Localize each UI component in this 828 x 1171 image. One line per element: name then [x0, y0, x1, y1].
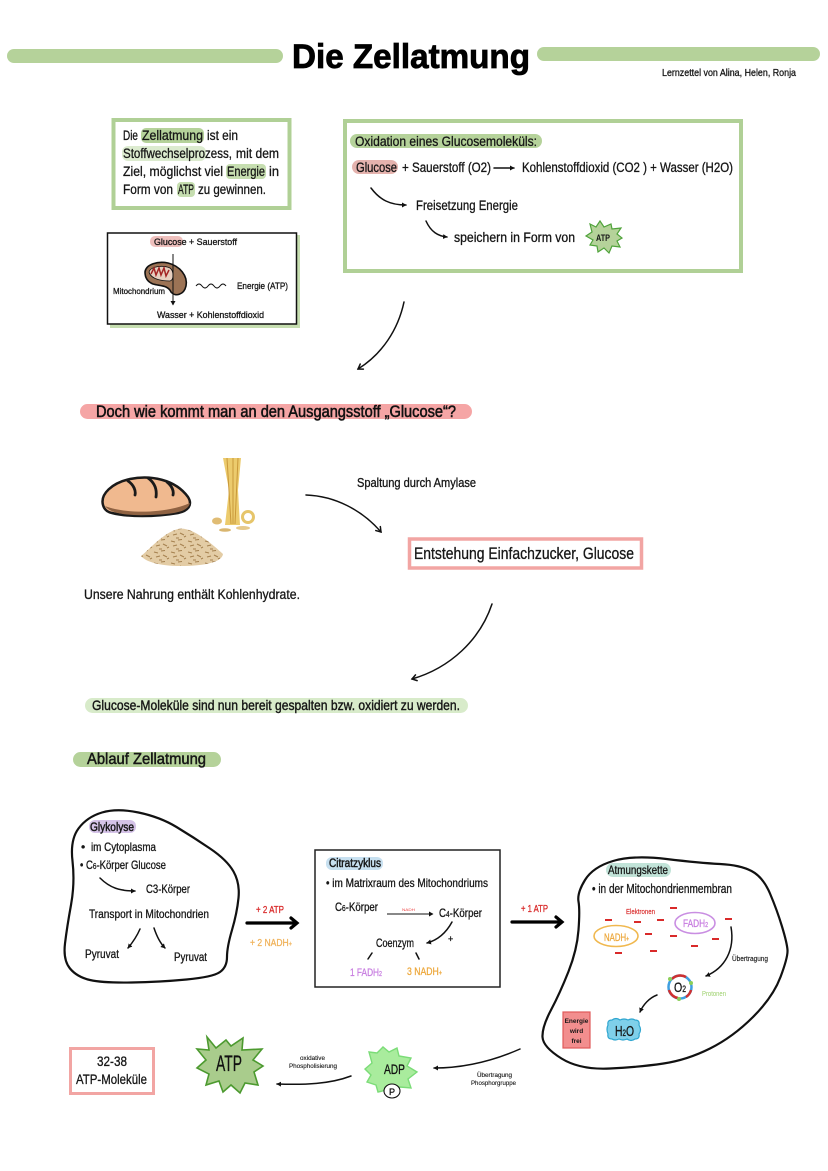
- panel: definition: in: [269, 164, 279, 179]
- panel: glycolysis: im Cytoplasma: [91, 840, 156, 854]
- arrow: to simple sugars: [306, 495, 381, 532]
- panel: oxidation of a glucose molecule: Oxidation eines Glucosemoleküls:: [355, 134, 537, 149]
- panel: simple sugar formation: [410, 539, 642, 568]
- panel: glycolysis: C3-Körper: [146, 882, 190, 896]
- panel: respiratory chain: Elektronen: [626, 907, 655, 916]
- panel: citrate cycle: • im Matrixraum des Mitochondriums: [326, 876, 488, 890]
- box: energy released: wird: [569, 1028, 583, 1035]
- panel: mitochondrion diagram: Glucose + Sauerstoff: [154, 237, 237, 247]
- arrow: citrate cycle to respiratory chain: + 1 ATP: [521, 903, 548, 915]
- panel: definition: Die: [123, 128, 138, 143]
- icon: ADP burst: [365, 1047, 417, 1098]
- label: cleavage by amylase: Spaltung durch Amylase: [357, 476, 476, 490]
- panel: definition: ATP: [178, 182, 194, 197]
- icon: ADP burst: ADP: [384, 1062, 405, 1077]
- panel: oxidation of a glucose molecule: Glucose: [356, 160, 397, 175]
- panel: definition: Energie: [227, 164, 265, 179]
- box: 32-38 ATP molecules: 32-38: [97, 1053, 127, 1069]
- panel: citrate cycle: [315, 850, 500, 987]
- title banner: [7, 38, 820, 76]
- icon: grain pile: [141, 529, 223, 566]
- oval: NADH: NADH+: [604, 932, 629, 944]
- arrow: oxidative phosphorylation: Phospholisierung: [289, 1063, 337, 1070]
- panel: citrate cycle: C6-Körper: [335, 900, 378, 914]
- heading: glucose question: Doch wie kommt man an den Ausgangsstoff „Glucose“?: [96, 403, 456, 421]
- arrow: to glucose molecules: [412, 604, 492, 679]
- icon: ATP burst small: [586, 221, 622, 253]
- panel: definition: mit dem: [236, 146, 279, 161]
- panel: citrate cycle: NADH: [402, 907, 415, 912]
- panel: simple sugar formation: Entstehung Einfachzucker, Glucose: [414, 545, 634, 563]
- panel: glycolysis: [65, 810, 239, 983]
- icon: ATP burst small: ATP: [596, 233, 611, 244]
- panel: glycolysis: Pyruvat: [85, 947, 120, 961]
- panel: citrate cycle: 1 FADH2: [350, 967, 382, 979]
- panel: glycolysis: •: [81, 840, 85, 854]
- panel: oxidation of a glucose molecule: speichern in Form von: [454, 230, 575, 245]
- icon: ATP burst large: [197, 1037, 263, 1093]
- panel: citrate cycle: +: [448, 934, 453, 944]
- panel: respiratory chain: Atmungskette: [608, 863, 668, 877]
- panel: citrate cycle: 3 NADH+: [407, 966, 442, 978]
- oval: FADH2: [675, 912, 715, 934]
- panel: citrate cycle: C4-Körper: [439, 906, 482, 920]
- arrow: glycolysis to citrate cycle: [247, 904, 297, 949]
- arrow: glycolysis to citrate cycle: + 2 NADH+: [250, 937, 292, 949]
- icon: bread: [103, 478, 190, 516]
- arrow: phosphate transfer: Phosphorgruppe: [471, 1080, 516, 1087]
- icon: ADP burst: P: [389, 1087, 395, 1097]
- panel: definition: Form von: [123, 182, 173, 197]
- arrow: phosphate transfer: [434, 1049, 520, 1087]
- icon: mitochondrion: [145, 262, 186, 295]
- arrow: oxidative phosphorylation: oxidative: [300, 1055, 325, 1062]
- oval: NADH: [594, 926, 638, 946]
- panel: oxidation of a glucose molecule: Freisetzung Energie: [416, 198, 518, 213]
- box: energy released: frei: [571, 1038, 582, 1045]
- icon: pasta: [212, 458, 254, 532]
- panel: respiratory chain: Protonen: [702, 989, 726, 998]
- box: 32-38 ATP molecules: [70, 1048, 154, 1094]
- callout: glucose molecules ready: Glucose-Moleküle sind nun bereit gespalten bzw. oxidiert zu werden.: [92, 697, 460, 713]
- panel: definition: Stoffwechselprozess,: [123, 146, 232, 161]
- panel: definition: Zellatmung: [142, 128, 203, 143]
- arrow: glycolysis to citrate cycle: + 2 ATP: [256, 904, 284, 916]
- panel: mitochondrion diagram: [108, 233, 300, 328]
- box: energy released: [563, 1012, 590, 1048]
- heading: process of cellular respiration: Ablauf Zellatmung: [87, 751, 206, 768]
- icon: water cloud: H2O: [615, 1023, 634, 1040]
- panel: mitochondrion diagram: Wasser + Kohlenstoffdioxid: [157, 310, 264, 320]
- icon: oxygen ring: O2: [674, 979, 686, 995]
- panel: oxidation of a glucose molecule: [345, 121, 741, 271]
- title: Die Zellatmung: [292, 38, 530, 76]
- panel: glycolysis: • C6-Körper Glucose: [80, 858, 166, 872]
- panel: definition: zu gewinnen.: [198, 182, 266, 197]
- icon: oxygen ring: [668, 975, 693, 1001]
- panel: oxidation of a glucose molecule: + Sauerstoff (O2): [402, 160, 491, 175]
- box: energy released: Energie: [565, 1018, 589, 1025]
- authors note: Lernzettel von Alina, Helen, Ronja: [662, 67, 796, 79]
- panel: glycolysis: Pyruvat: [174, 950, 208, 964]
- panel: respiratory chain: • in der Mitochondrienmembran: [592, 882, 732, 896]
- panel: citrate cycle: Citratzyklus: [329, 858, 381, 870]
- panel: definition: ist ein: [207, 128, 238, 143]
- text: food contains carbohydrates: Unsere Nahrung enthält Kohlenhydrate.: [84, 587, 300, 602]
- panel: glycolysis: Glykolyse: [90, 822, 134, 834]
- arrow: citrate cycle to respiratory chain: [512, 903, 562, 927]
- oval: FADH2: FADH2: [683, 918, 708, 930]
- icon: ATP burst large: ATP: [216, 1051, 242, 1076]
- box: 32-38 ATP molecules: ATP-Moleküle: [76, 1071, 147, 1087]
- panel: respiratory chain: Übertragung: [732, 954, 768, 963]
- panel: mitochondrion diagram: Energie (ATP): [237, 281, 288, 291]
- panel: mitochondrion diagram: Mitochondrium: [113, 286, 165, 296]
- arrow: phosphate transfer: Übertragung: [477, 1071, 512, 1079]
- panel: definition: Ziel, möglichst viel: [123, 164, 223, 179]
- electrons: [605, 907, 732, 954]
- arrow: oxidative phosphorylation: [277, 1055, 351, 1084]
- panel: definition: [114, 120, 290, 208]
- panel: citrate cycle: Coenzym: [376, 936, 414, 950]
- panel: glycolysis: Transport in Mitochondrien: [89, 907, 209, 921]
- icon: water cloud: [607, 1018, 640, 1040]
- panel: respiratory chain: [542, 857, 788, 1069]
- panel: oxidation of a glucose molecule: Kohlenstoffdioxid (CO2 ) + Wasser (H2O): [522, 160, 733, 175]
- arrow: to glucose question: [358, 302, 404, 369]
